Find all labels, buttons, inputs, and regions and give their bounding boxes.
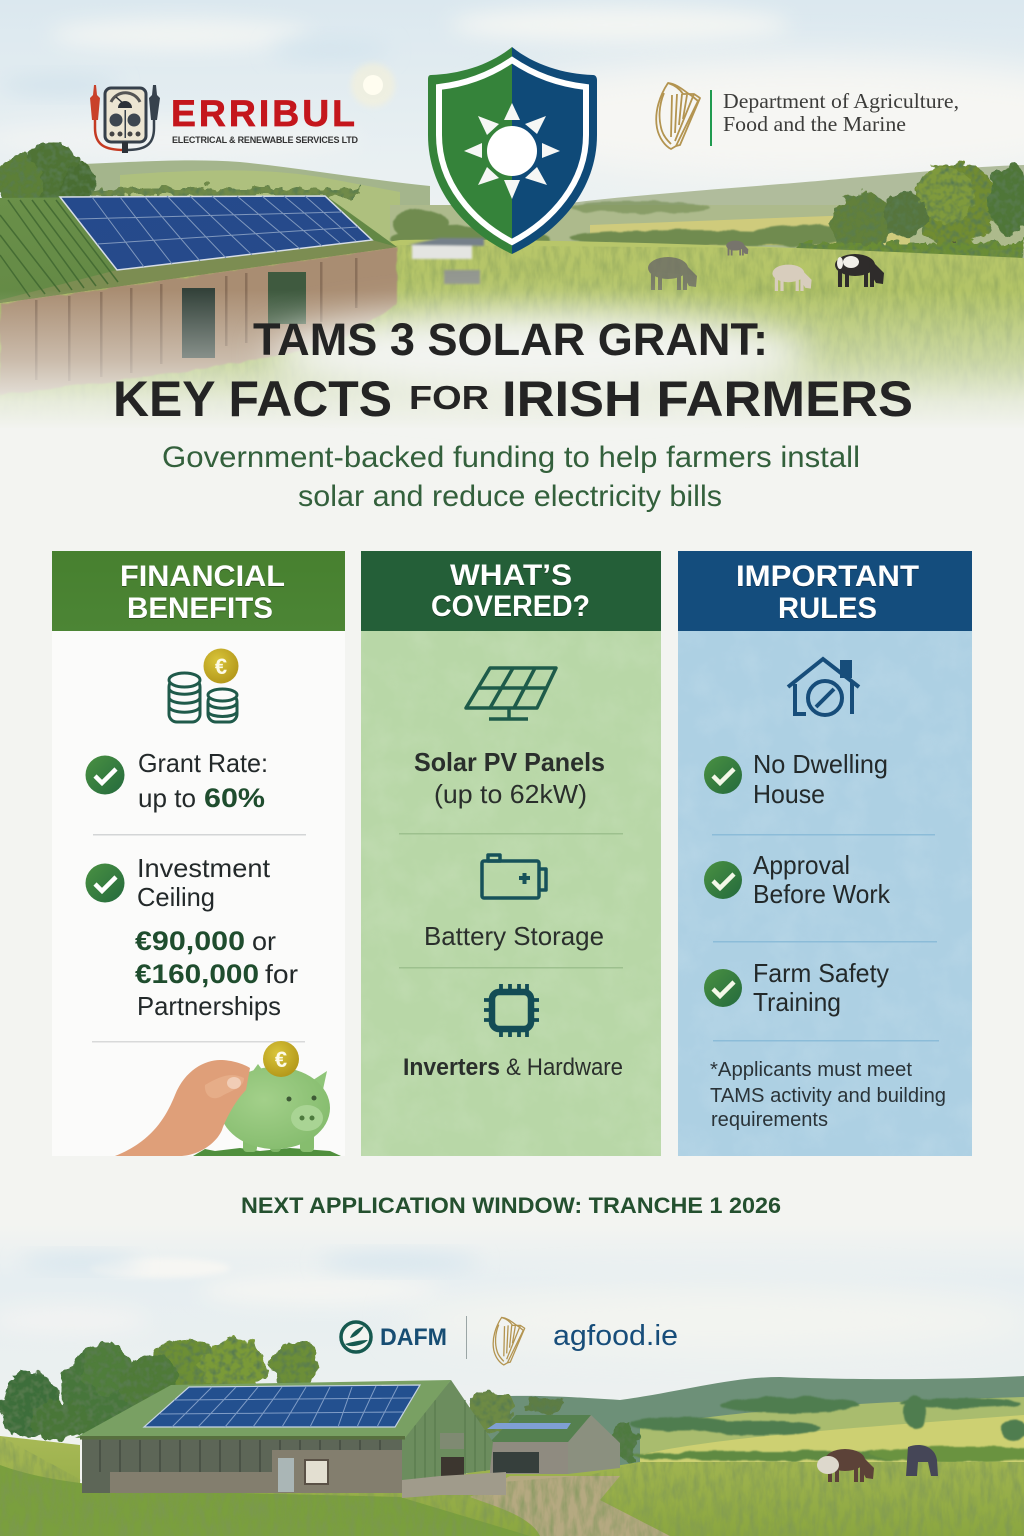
icon: no dwelling house [788, 659, 859, 715]
cows [817, 1445, 938, 1482]
icon: check [704, 969, 742, 1007]
item: solar PV panels: Solar PV Panels [414, 747, 605, 777]
next application window: NEXT APPLICATION WINDOW: TRANCHE 1 2026 [241, 1193, 781, 1218]
illustration: hand and piggy bank [115, 1041, 341, 1156]
logo: Department of Agriculture [656, 83, 959, 149]
panel header: financial benefits [52, 551, 345, 631]
footnote [710, 1059, 946, 1131]
header landscape scene [0, 0, 1024, 430]
benefit: investment ceiling: €90,000 [135, 926, 245, 956]
rule: farm safety training: Training [753, 987, 841, 1017]
panel header: important rules: RULES [778, 592, 877, 625]
benefit: investment ceiling [86, 853, 298, 1021]
item: solar PV panels: (up to 62kW) [434, 779, 587, 809]
icon: check [704, 756, 742, 794]
benefit: grant rate [86, 748, 268, 813]
icon: coin stacks [169, 648, 238, 722]
title: IRISH FARMERS [502, 371, 913, 427]
icon: microchip [484, 984, 539, 1037]
second barn [487, 1415, 620, 1474]
tagline: ELECTRICAL & RENEWABLE SERVICES LTD [172, 135, 358, 145]
benefit: grant rate: up to [138, 783, 196, 813]
item: battery storage: Battery Storage [424, 921, 604, 951]
panel: financial benefits [52, 551, 345, 1156]
website: agfood.ie [553, 1320, 678, 1352]
benefit: grant rate: Grant Rate: [138, 748, 268, 778]
icon: harp [493, 1317, 525, 1365]
panel header: what's covered [361, 551, 661, 631]
panel header: important rules: IMPORTANT [736, 560, 919, 593]
item: inverters and hardware [403, 1054, 623, 1081]
main barn with solar panels [75, 1380, 506, 1498]
benefit: investment ceiling: Partnerships [137, 991, 281, 1021]
rule: farm safety training [704, 958, 889, 1017]
icon: check [704, 861, 742, 899]
rule: approval before work [704, 850, 891, 909]
panel: what's covered [361, 551, 661, 1156]
benefit: investment ceiling: €160,000 [135, 959, 259, 989]
icon: coin stacks: € [215, 654, 227, 679]
panel header: what's covered: COVERED? [431, 590, 590, 623]
panel header: what's covered: WHAT’S [450, 559, 572, 592]
benefit: investment ceiling: for [265, 959, 298, 989]
subtitle [162, 441, 860, 513]
benefit: grant rate: 60% [204, 783, 265, 813]
trees [0, 142, 1024, 264]
icon: sun glow [351, 63, 395, 107]
icon: solar shield emblem [428, 47, 597, 254]
grass [0, 1436, 1024, 1536]
title: TAMS 3 SOLAR GRANT: [253, 314, 768, 365]
title: FOR [409, 379, 489, 416]
cows [648, 241, 884, 291]
rule: no dwelling house [704, 749, 888, 809]
footer logos [341, 1316, 678, 1365]
item: solar PV panels [414, 747, 605, 809]
logo: Erribul Electrical [90, 85, 358, 153]
subtitle: Government-backed funding to help farmers install [162, 441, 860, 474]
icon: solar panel [466, 668, 556, 719]
icon: check [86, 756, 124, 794]
panel header: financial benefits: FINANCIAL [120, 560, 285, 593]
icon: harp [656, 83, 700, 149]
department name: Department of Agriculture, [723, 89, 959, 113]
footnote: TAMS activity and building [710, 1085, 946, 1107]
rule: farm safety training: Farm Safety [753, 958, 889, 988]
footnote: requirements [711, 1109, 828, 1131]
department name: Food and the Marine [723, 112, 906, 136]
title [113, 314, 913, 427]
barn with solar panels [0, 195, 397, 395]
rule: no dwelling house: House [753, 779, 825, 809]
title: KEY FACTS [113, 371, 392, 427]
benefit: investment ceiling: or [252, 926, 276, 956]
field [0, 240, 1024, 428]
item: inverters and hardware: & Hardware [506, 1054, 623, 1081]
benefit: investment ceiling: Ceiling [137, 882, 215, 912]
panel header: important rules [678, 551, 972, 631]
fog transition [0, 290, 1024, 430]
illustration: hand and piggy bank: € [275, 1047, 287, 1072]
trees [0, 1338, 640, 1460]
wordmark: ERRIBUL [171, 93, 358, 134]
farm buildings [408, 238, 484, 284]
distant hills [470, 1376, 1024, 1470]
panel: important rules [678, 551, 972, 1156]
rule: approval before work: Approval [753, 850, 850, 880]
icon: battery [482, 855, 546, 898]
footer landscape scene [0, 1225, 1024, 1536]
icon: check [86, 864, 124, 902]
department name [723, 89, 959, 136]
icon: multimeter [90, 85, 160, 153]
panel header: financial benefits: BENEFITS [127, 592, 273, 625]
item: inverters and hardware: Inverters [403, 1054, 500, 1081]
rule: no dwelling house: No Dwelling [753, 749, 888, 779]
subtitle: solar and reduce electricity bills [298, 480, 722, 513]
logo: DAFM [341, 1322, 447, 1352]
logo: DAFM: DAFM [380, 1324, 447, 1351]
benefit: investment ceiling: Investment [137, 853, 271, 883]
rule: approval before work: Before Work [753, 879, 891, 909]
footnote: *Applicants must meet [710, 1059, 912, 1081]
